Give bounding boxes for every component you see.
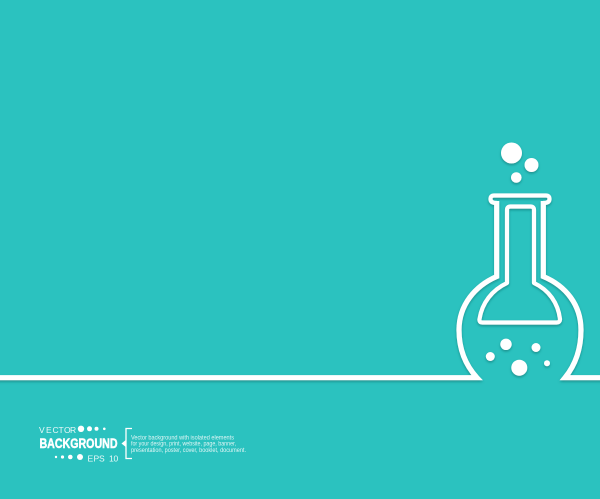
label: background: BACKGROUND: [40, 436, 118, 451]
logo: vector background eps 10: [39, 425, 118, 463]
bubbles above flask: [501, 142, 538, 183]
label: vector: VECTOR: [39, 425, 76, 435]
description text: Vector background with isolated elements: [131, 434, 234, 441]
description text: presentation, poster, cover, booklet, document.: [131, 447, 246, 454]
bracket: [122, 428, 132, 458]
flask and baseline line: [0, 196, 600, 378]
description text: for your design, print, website, page, banner,: [131, 441, 236, 448]
dots row top: [78, 426, 106, 432]
label: eps 10: EPS 10: [88, 453, 118, 463]
bubbles inside flask: [486, 339, 550, 376]
baseline with flask body: [0, 201, 600, 378]
flask rim: [490, 196, 550, 203]
flask inner liquid outline: [479, 206, 560, 322]
dots row bottom: [55, 454, 83, 460]
description text: [131, 434, 246, 454]
